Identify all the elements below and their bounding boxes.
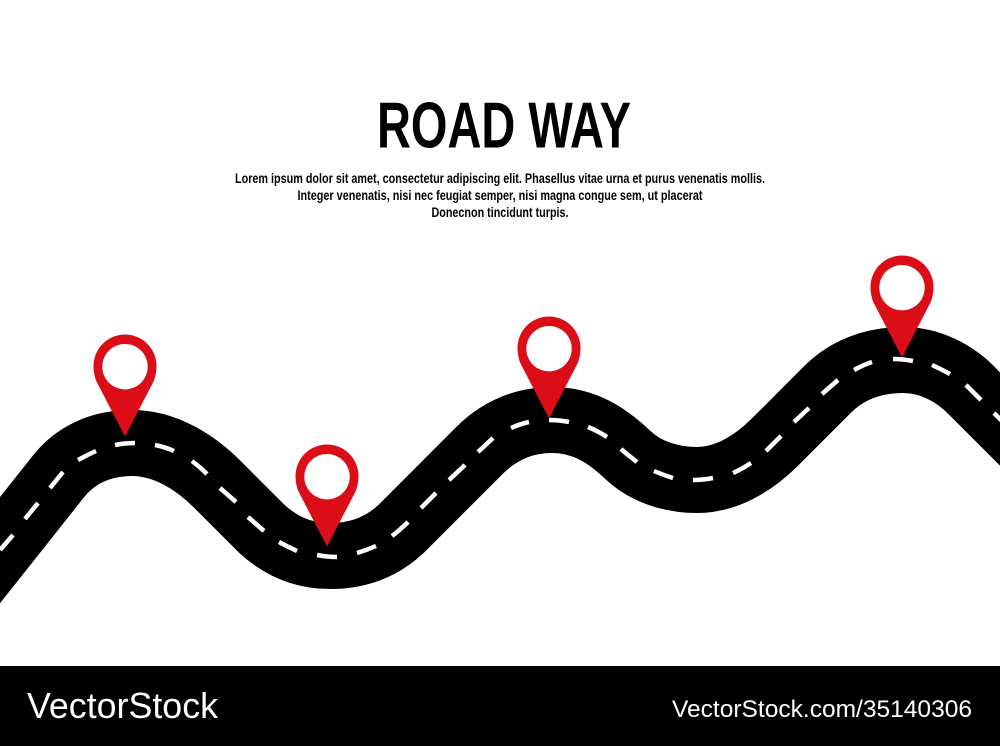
pin 3	[518, 316, 580, 418]
lane dashes	[0, 359, 1000, 557]
winding road	[0, 359, 1000, 588]
road surface	[0, 360, 1000, 588]
description text: Integer venenatis, nisi nec feugiat semper, nisi magna congue sem, ut placerat	[298, 188, 703, 203]
pin 2	[296, 444, 358, 546]
pin 4	[870, 256, 934, 358]
footer url: VectorStock.com/35140306	[672, 696, 972, 723]
description text	[235, 171, 765, 220]
description text: Donecnon tincidunt turpis.	[432, 205, 568, 220]
footer bar	[0, 666, 1000, 746]
title: ROAD WAY	[377, 88, 631, 162]
description text: Lorem ipsum dolor sit amet, consectetur adipiscing elit. Phasellus vitae urna et purus venenatis mollis.	[235, 171, 765, 186]
footer logo: VectorStock	[27, 685, 219, 726]
pin 1	[94, 334, 156, 436]
